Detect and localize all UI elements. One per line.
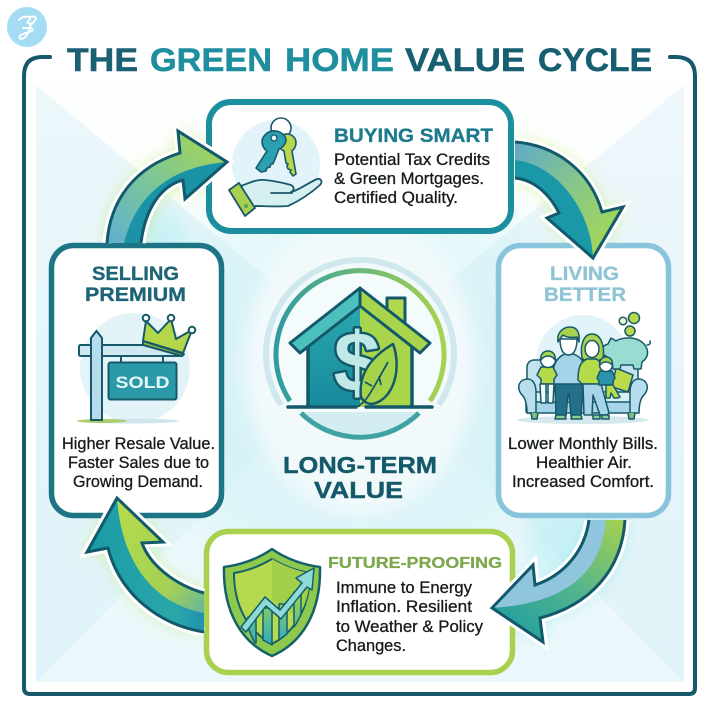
text: future-proofing body [336,579,484,655]
panel: selling premium [52,246,222,516]
background panel [36,85,684,682]
heading: living better [544,264,626,306]
mother [578,334,609,419]
icon: family on sofa with piggy bank [517,312,650,424]
dollar symbol: $ [334,315,380,409]
sign label: SOLD [116,373,170,392]
text: future-proofing body: Changes. [336,637,406,655]
icon: sold sign with crown [77,313,195,424]
text: living better body: Healthier Air. [536,454,632,472]
title: CYCLE [538,42,652,78]
text: living better body [508,435,658,491]
center icon: green home with dollar and leaf [266,260,454,437]
title: GREEN [150,42,272,78]
center label: long-term value: VALUE [314,477,403,503]
icon: leaf [356,344,397,407]
arrow: buying to living [515,142,623,258]
father [553,327,584,419]
logo badge [7,7,47,47]
text: living better body: Lower Monthly Bills. [508,435,658,453]
center label: long-term value [283,452,437,503]
left child [537,351,557,403]
heading: future-proofing: FUTURE-PROOFING [328,555,502,572]
text: future-proofing body: Inflation. Resilient [336,598,472,616]
center label: long-term value: LONG-TERM [283,452,437,478]
text: buying smart body: & Green Mortgages. [334,170,484,188]
panel: future-proofing [206,532,512,672]
arrow: future-proofing to selling [87,498,204,632]
text: buying smart body [334,151,490,207]
right child [597,357,620,398]
title: THE [67,42,138,78]
heading: selling premium: SELLING [92,264,179,285]
sofa [519,360,647,419]
text: selling premium body: Higher Resale Value. [62,435,215,453]
panel: buying smart [209,102,511,231]
arrow glows [87,131,625,642]
heading: selling premium: PREMIUM [85,285,186,306]
title [67,42,652,78]
heading: buying smart: BUYING SMART [334,126,493,147]
text: selling premium body: Faster Sales due to [68,454,209,472]
panel: living better [498,246,668,516]
icon: crown [143,315,195,356]
title: HOME [285,42,394,78]
text: future-proofing body: to Weather & Policy [336,618,484,636]
text: buying smart body: Certified Quality. [334,189,458,207]
icon: keys in hand [229,118,321,216]
text: selling premium body: Growing Demand. [73,473,203,491]
heading: living better: BETTER [544,285,626,306]
text: future-proofing body: Immune to Energy [336,579,473,597]
arrow: living to future-proofing [492,520,625,642]
arrow: selling to buying [107,131,227,243]
title: VALUE [405,42,525,78]
heading: living better: LIVING [550,264,619,285]
heading: selling premium [85,264,186,306]
icon: shield with growth chart [224,549,320,656]
text: selling premium body [62,435,215,491]
piggy bank [602,312,650,369]
text: living better body: Increased Comfort. [512,473,654,491]
text: buying smart body: Potential Tax Credits [334,151,490,169]
